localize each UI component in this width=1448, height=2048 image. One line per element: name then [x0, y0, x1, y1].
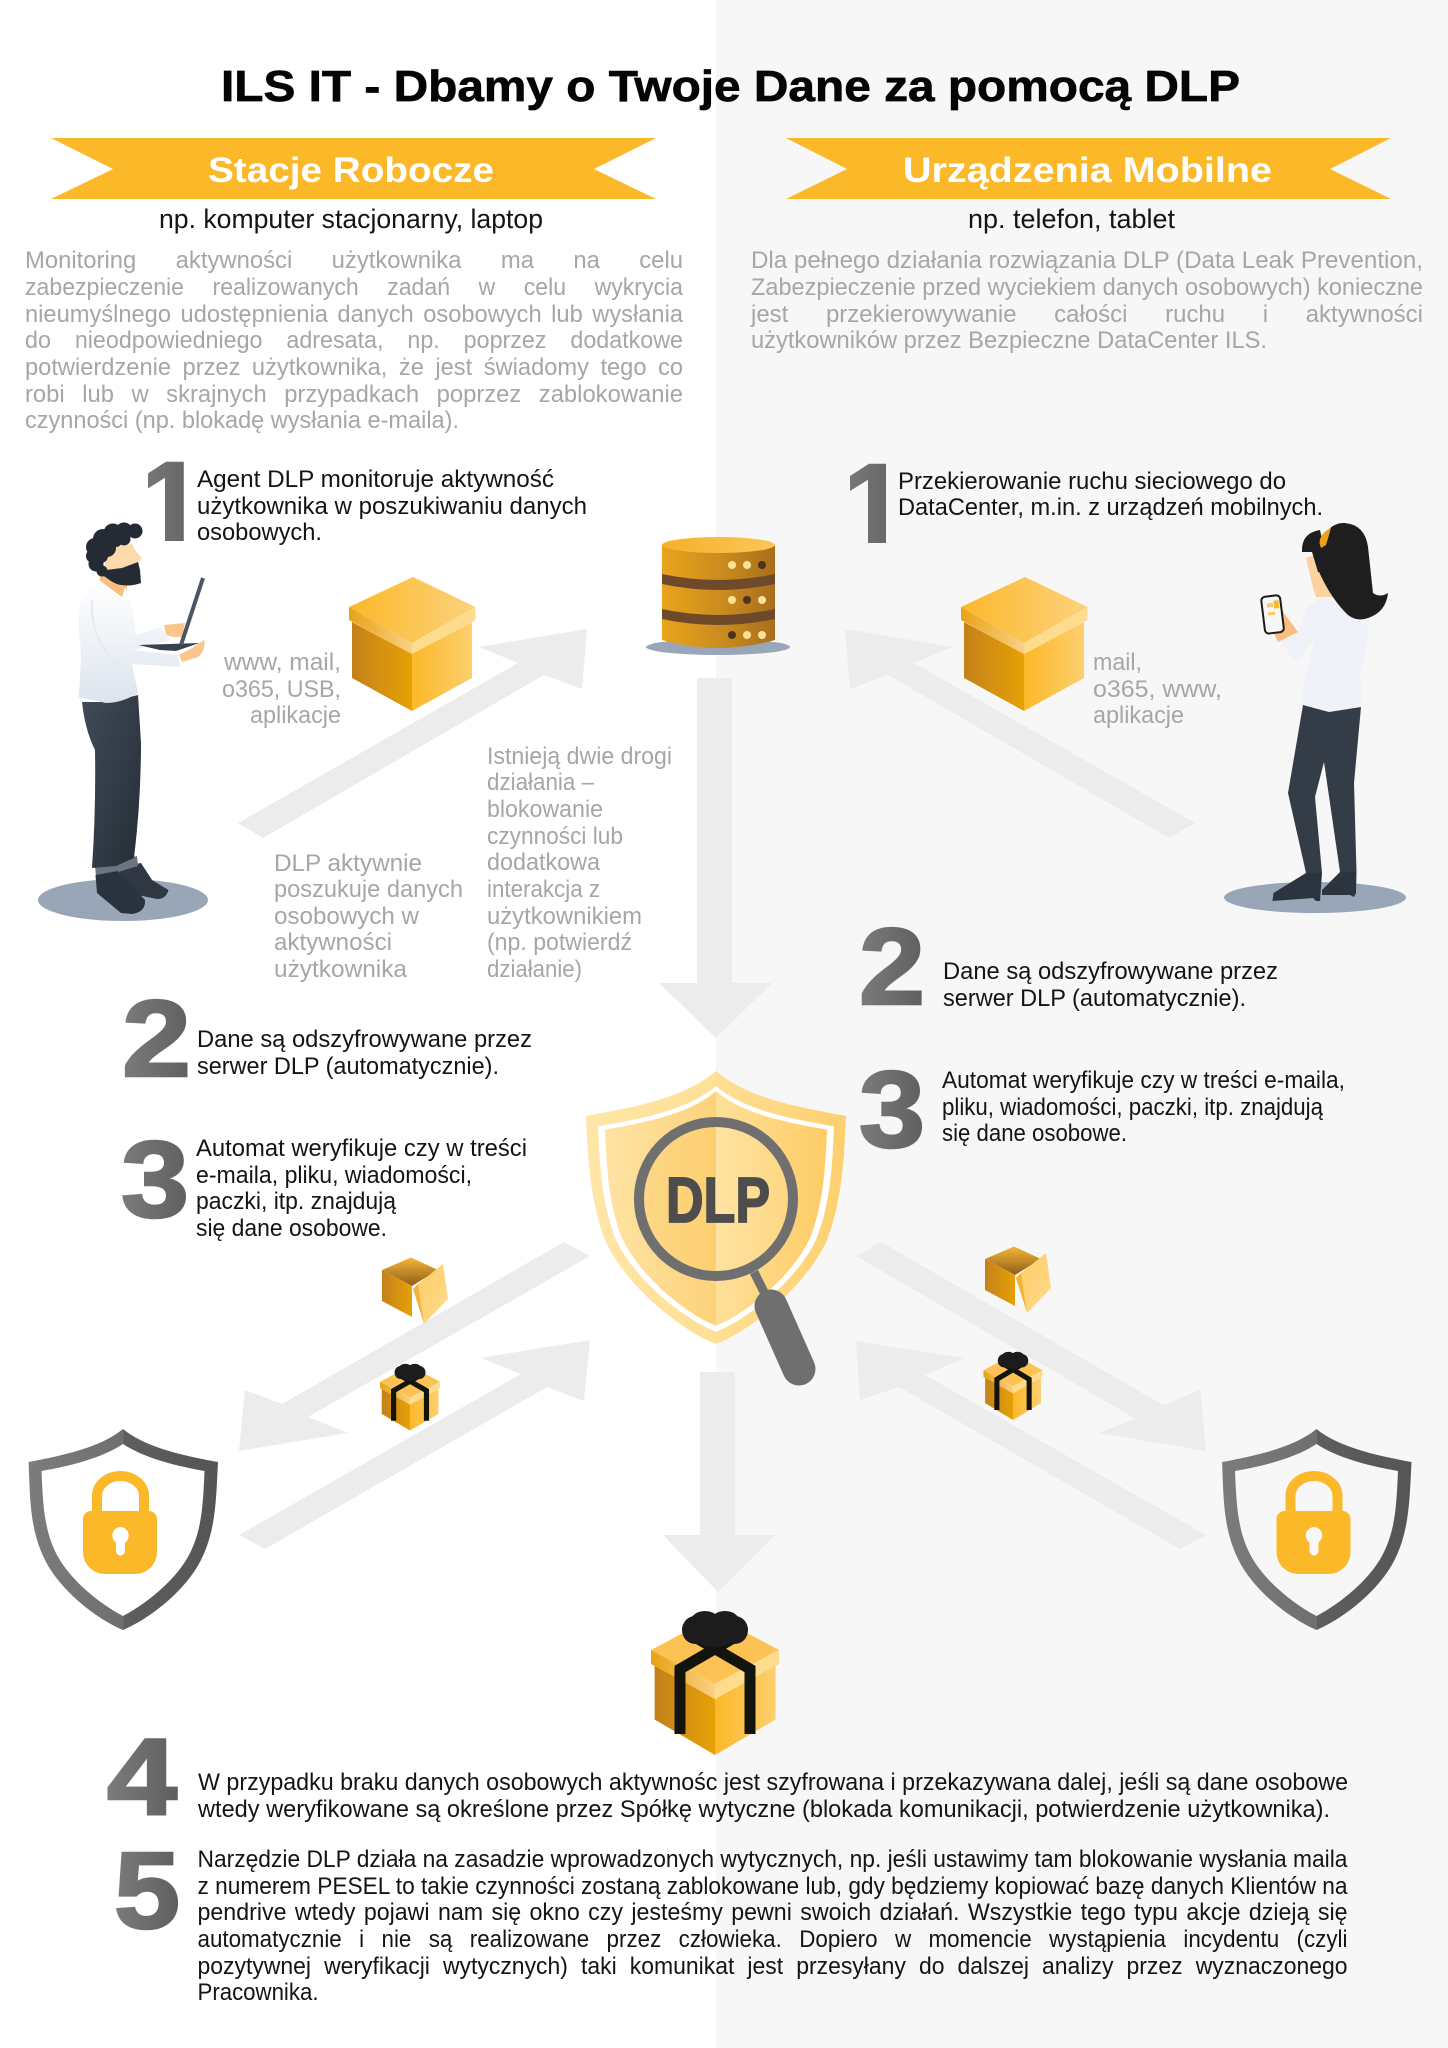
text block: intro left: nieumyślnego udostępnienia danych osobowych lub wysłania [25, 301, 684, 328]
banner: Urządzenia Mobilne [786, 138, 1391, 199]
number 4: 4 [107, 1716, 177, 1838]
step 3 text left [196, 1135, 527, 1242]
step 2 text right [943, 958, 1278, 1012]
step 2 text right: Dane są odszyfrowywane przez [943, 958, 1278, 985]
arrow: mobile to datacenter, right [845, 629, 1195, 838]
step 3 text left: się dane osobowe. [196, 1215, 387, 1242]
step 5 text: pendrive wtedy pojawi nam się okno czy jesteśmy pewni swoich działań. Wszystkie tego typu akcje dzieją się [198, 1899, 1348, 1926]
arrow: DLP to lock right [856, 1242, 1206, 1451]
magnifier handle [754, 1272, 766, 1296]
banner: Stacje Robocze [51, 138, 656, 199]
top disk [662, 545, 775, 580]
step 5 text: pozytywnej weryfikacji wytycznych) taki komunikat jest przesyłany do dalszej analizy przez wyznaczonego [198, 1953, 1348, 1980]
text block: intro left: robi lub w skrajnych przypadkach poprzez zablokowanie [25, 381, 683, 408]
step 1 text left: Agent DLP monitoruje aktywność [197, 466, 554, 493]
background: right grey panel [716, 0, 1448, 2048]
label: channels right: o365, www, [1093, 676, 1222, 703]
arrow: lock to DLP right [856, 1341, 1206, 1549]
icon: lock shield left [29, 1429, 218, 1630]
icon: box right [961, 577, 1088, 711]
shirt [78, 580, 180, 703]
note: two ways of action: działania – [487, 769, 595, 796]
number 2 left: 2 [122, 978, 191, 1100]
bottom disk [662, 610, 775, 648]
label: channels left: www, mail, [223, 649, 341, 676]
middle disk [662, 575, 775, 615]
step 4 text: wtedy weryfikowane są określone przez Spółkę wytyczne (blokada komunikacji, potwierdzenie użytkownika). [197, 1796, 1330, 1823]
shirt [1278, 597, 1370, 711]
upper hand [164, 623, 185, 637]
padlock [97, 1476, 144, 1516]
note: DLP actively searches: aktywności [274, 929, 392, 956]
step 1 text left: użytkownika w poszukiwaniu danych [197, 493, 587, 520]
step 2 text left: serwer DLP (automatycznie). [197, 1053, 499, 1080]
note: two ways of action: Istnieją dwie drogi [487, 743, 672, 770]
illustration: woman with phone [1224, 523, 1406, 913]
socks [95, 856, 138, 876]
ponytail [1320, 523, 1388, 619]
note: two ways of action: działanie) [487, 956, 582, 983]
arrow: DLP to gift [663, 1372, 775, 1592]
phone [1261, 595, 1284, 634]
front shoe [96, 871, 145, 914]
step 5 text: Pracownika. [198, 1979, 318, 2006]
note: two ways of action: użytkownikiem [487, 903, 642, 930]
step 1 text left: osobowych. [197, 519, 322, 546]
step 4 text [197, 1769, 1348, 1823]
face [105, 544, 142, 578]
number 5: 5 [114, 1830, 180, 1952]
note: DLP actively searches: poszukuje danych [274, 876, 463, 903]
arrow: user to datacenter, left [238, 629, 587, 838]
text block: intro left [25, 247, 684, 434]
number 1 left: 1 [133, 433, 209, 586]
step 3 text left: paczki, itp. znajdują [196, 1188, 397, 1215]
step 3 text right: pliku, wiadomości, paczki, itp. znajdują [942, 1094, 1324, 1121]
icon: small gift left [380, 1364, 440, 1431]
step 1 text left [197, 466, 587, 546]
text block: intro right [750, 247, 1423, 354]
magnifier lens [639, 1122, 793, 1276]
label: channels left: aplikacje [250, 702, 341, 729]
step 2 text right: serwer DLP (automatycznie). [943, 985, 1246, 1012]
label: channels right [1093, 649, 1222, 729]
number 2 right: 2 [859, 906, 925, 1028]
icon: open box left [382, 1258, 448, 1324]
note: DLP actively searches: użytkownika [274, 956, 408, 983]
shoes [1272, 873, 1322, 901]
note: two ways of action: blokowanie [487, 796, 603, 823]
icon: DLP shield with magnifier [586, 1071, 846, 1369]
banner: Stacje Robocze: Stacje Robocze [208, 151, 494, 190]
pants [82, 695, 141, 868]
status lights [728, 561, 766, 639]
pants [1288, 705, 1361, 873]
DLP label: DLP [666, 1164, 770, 1236]
step 2 text left: Dane są odszyfrowywane przez [197, 1026, 532, 1053]
sleeve fold [92, 600, 118, 664]
arrow: lock to DLP left [239, 1340, 590, 1549]
text block: intro right: jest przekierowywanie całości ruchu i aktywności [750, 301, 1423, 328]
step 4 text: W przypadku braku danych osobowych aktywnośc jest szyfrowana i przekazywana dalej, jeśli są dane osobowe [198, 1769, 1348, 1796]
icon: database server [646, 537, 790, 655]
label: channels left [222, 649, 341, 729]
step 5 text: z numerem PESEL to takie czynności zostaną zablokowane lub, gdy będziemy kopiować bazę danych Klientów na [198, 1873, 1348, 1900]
step 5 text [198, 1846, 1348, 2006]
step 3 text left: e-maila, pliku, wiadomości, [196, 1162, 472, 1189]
label: channels left: o365, USB, [222, 676, 341, 703]
upper band [662, 570, 775, 590]
step 3 text right: Automat weryfikuje czy w treści e-maila, [942, 1067, 1345, 1094]
step 1 text right [898, 468, 1323, 521]
text block: intro right: użytkowników przez Bezpieczne DataCenter ILS. [751, 327, 1267, 354]
text block: intro right: Zabezpieczenie przed wyciekiem danych osobowych) konieczne [751, 274, 1423, 301]
lower band [662, 604, 775, 625]
note: two ways of action: interakcja z [487, 876, 600, 903]
step 1 text right: DataCenter, m.in. z urządzeń mobilnych. [898, 494, 1323, 521]
icon: open box right [985, 1246, 1051, 1313]
label: channels right: mail, [1093, 649, 1142, 676]
subtitle right: np. telefon, tablet [968, 204, 1175, 234]
text block: intro left: czynności (np. blokadę wysłania e-maila). [25, 407, 459, 434]
banner: Urządzenia Mobilne: Urządzenia Mobilne [903, 151, 1272, 190]
icon: large gift [651, 1611, 779, 1755]
step 5 text: Narzędzie DLP działa na zasadzie wprowadzonych wytycznych, np. jeśli ustawimy tam blokowanie wysłania maila [198, 1846, 1348, 1873]
text block: intro right: Dla pełnego działania rozwiązania DLP (Data Leak Prevention, [751, 247, 1423, 274]
number 1 right: 1 [836, 435, 912, 588]
step 3 text left: Automat weryfikuje czy w treści [196, 1135, 527, 1162]
neck [99, 572, 127, 598]
illustration: man with laptop [38, 522, 208, 921]
note: two ways of action [487, 743, 672, 983]
step 1 text right: Przekierowanie ruchu sieciowego do [898, 468, 1286, 495]
title: ILS IT - Dbamy o Twoje Dane za pomocą DLP [221, 62, 1240, 111]
text block: intro left: potwierdzenie przez użytkownika, że jest świadomy tego co [25, 354, 683, 381]
step 2 text left [197, 1026, 532, 1080]
step 3 text right: się dane osobowe. [942, 1120, 1127, 1147]
hair [86, 522, 142, 576]
padlock [1290, 1476, 1338, 1516]
note: DLP actively searches: DLP aktywnie [274, 850, 422, 877]
note: DLP actively searches [274, 850, 463, 983]
hands [1267, 612, 1298, 642]
note: DLP actively searches: osobowych w [274, 903, 420, 930]
arrow: DLP to lock left [239, 1242, 590, 1451]
lower hand [179, 640, 205, 662]
number 3 right: 3 [859, 1049, 925, 1171]
note: two ways of action: czynności lub [487, 823, 623, 850]
hair band [1320, 528, 1331, 548]
note: two ways of action: (np. potwierdź [487, 929, 632, 956]
laptop [138, 643, 200, 651]
arrow: datacenter to DLP [659, 678, 772, 1038]
note: two ways of action: dodatkowa [487, 849, 601, 876]
text block: intro left: Monitoring aktywności użytkownika ma na celu [25, 247, 683, 274]
icon: box left [349, 577, 476, 711]
front hair [1302, 530, 1330, 575]
text block: intro left: zabezpieczenie realizowanych zadań w celu wykrycia [25, 274, 684, 301]
step 3 text right [942, 1067, 1345, 1147]
face [1306, 550, 1333, 597]
background: left white panel [0, 0, 716, 2048]
icon: small gift right [984, 1352, 1043, 1420]
step 5 text: automatycznie i nie są realizowane przez człowieka. Dopiero w momencie wystąpienia incydentu (czyli [198, 1926, 1348, 1953]
number 3 left: 3 [121, 1119, 189, 1241]
label: channels right: aplikacje [1093, 702, 1184, 729]
text block: intro left: do nieodpowiedniego adresata, np. poprzez dodatkowe [25, 327, 683, 354]
subtitle left: np. komputer stacjonarny, laptop [159, 204, 543, 234]
beard [98, 560, 141, 585]
icon: lock shield right [1222, 1429, 1412, 1630]
back shoe [118, 863, 168, 899]
